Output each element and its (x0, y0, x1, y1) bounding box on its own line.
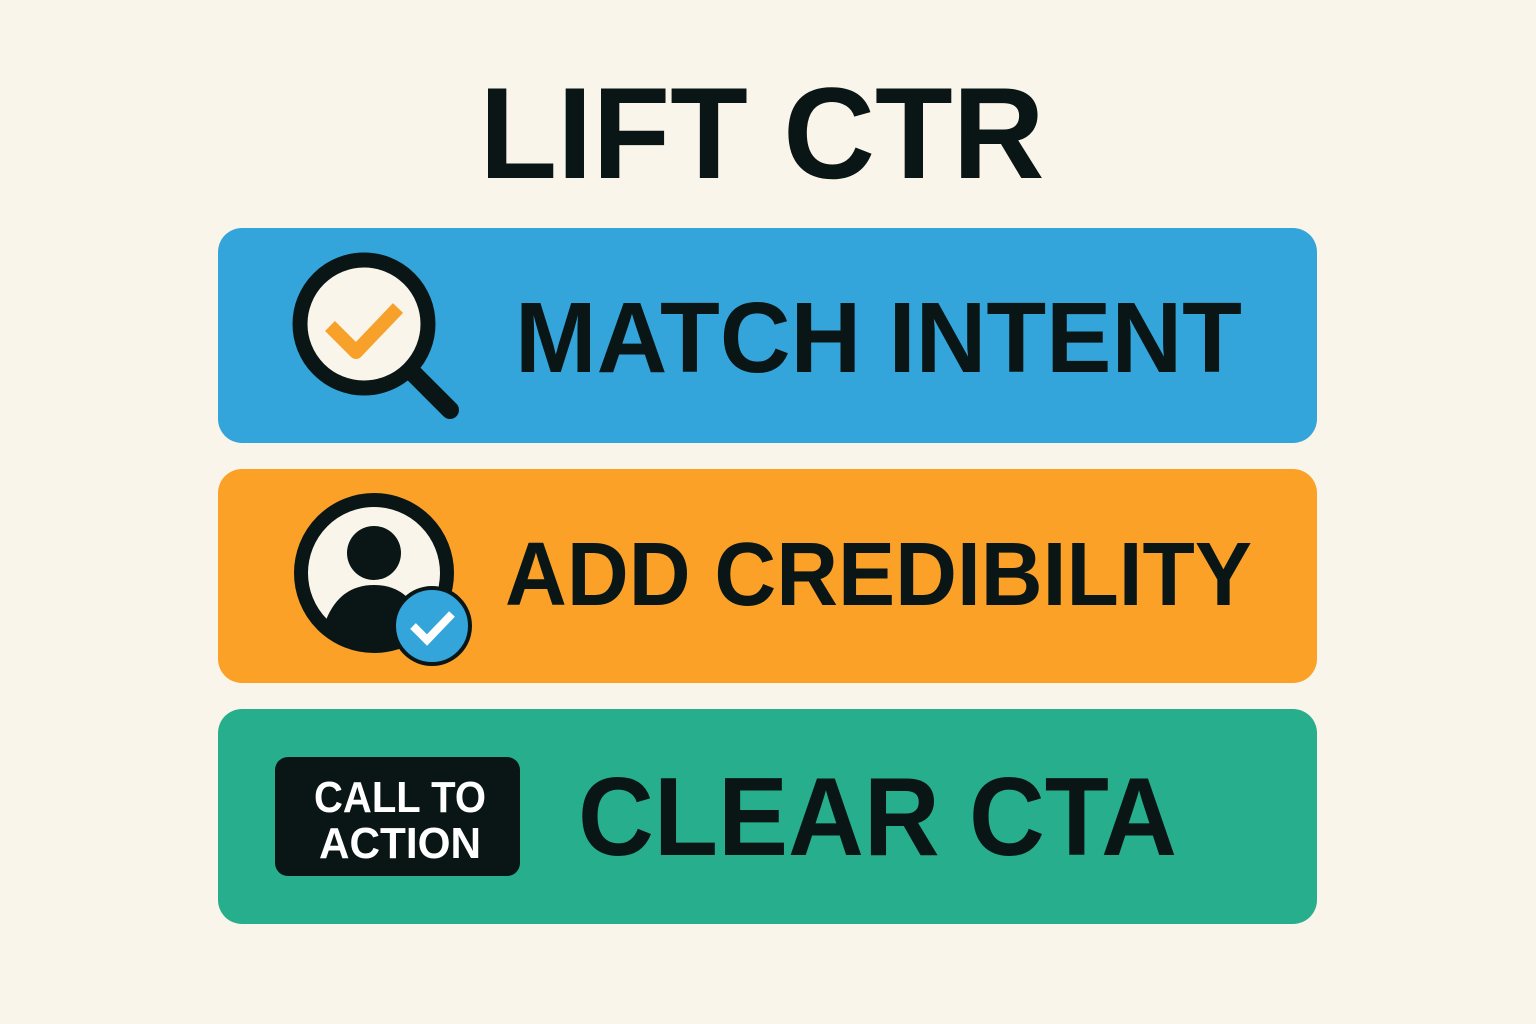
icon: call to action button (275, 757, 520, 876)
title: LIFT CTR (480, 60, 1044, 206)
icon: call to action button: ACTION (319, 819, 481, 868)
icon: call to action button: CALL TO (314, 773, 486, 822)
heading: match intent: MATCH INTENT (515, 282, 1242, 394)
heading: clear cta: CLEAR CTA (578, 755, 1177, 879)
heading: add credibility: ADD CREDIBILITY (505, 525, 1252, 625)
panel: add credibility (218, 469, 1317, 683)
panel: clear cta (218, 709, 1317, 924)
icon: verified person (301, 500, 470, 664)
icon: magnifier with check (300, 260, 450, 410)
panel: match intent (218, 228, 1317, 443)
